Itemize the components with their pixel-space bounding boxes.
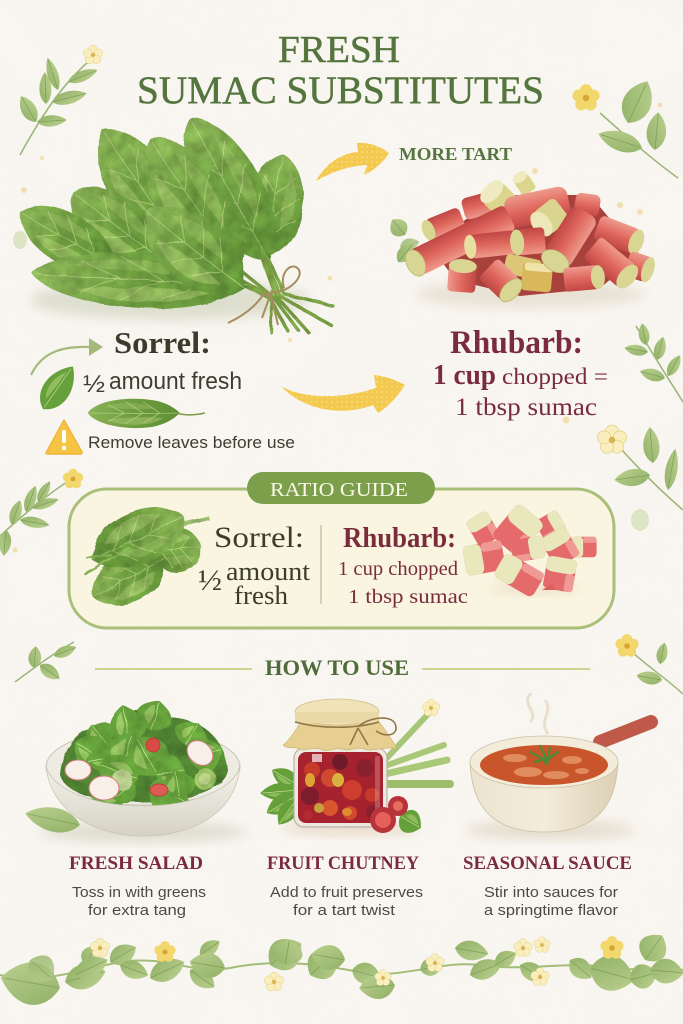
illustration: ratio sorrel: [81, 492, 209, 618]
illustration: sauce pot: [465, 693, 651, 839]
heading: sorrel: Sorrel:: [114, 325, 211, 360]
panel: ratio guide: [69, 472, 614, 628]
arrow: large yellow: [281, 375, 405, 413]
bowl interior: [46, 729, 240, 805]
garnish: [530, 746, 558, 764]
sprig: top right: [572, 75, 678, 178]
icon: warning: [46, 420, 82, 454]
radishes: [394, 806, 427, 838]
caption: seasonal sauce: Stir into sauces for: [484, 884, 618, 901]
jar cloth lid: [283, 718, 397, 750]
jar contents: [301, 754, 380, 820]
heading: rhubarb: Rhubarb:: [450, 325, 583, 361]
caption: seasonal sauce: a springtime flavor: [484, 902, 618, 919]
salad leaves: [60, 696, 228, 820]
illustration: ratio rhubarb: [462, 502, 597, 598]
sprig: right upper: [623, 322, 683, 402]
sauce: [480, 745, 608, 785]
sprig: top left: [14, 45, 103, 155]
caption: fruit chutney: [267, 853, 423, 919]
caption: fresh salad: FRESH SALAD: [69, 853, 203, 874]
caption: fresh salad: Toss in with greens: [72, 884, 206, 901]
caption: seasonal sauce: SEASONAL SAUCE: [463, 853, 632, 874]
label: more tart: MORE TART: [399, 144, 512, 164]
text: rhubarb ratio: 1 cup: [433, 359, 496, 391]
pot body: [470, 763, 618, 832]
radish slices: [65, 736, 218, 800]
splatter dots: [12, 102, 662, 552]
sprig: left lower: [15, 642, 78, 684]
icon: small sorrel leaf: [32, 359, 84, 417]
caption: fresh salad: [69, 853, 206, 919]
rhubarb stalks: [385, 712, 450, 784]
text: ratio sorrel: ½: [198, 564, 222, 597]
handle: [600, 722, 651, 742]
title: FRESH: [278, 29, 400, 71]
title: [137, 29, 544, 112]
text: ratio rhubarb: Rhubarb:: [343, 523, 456, 554]
garland: bottom border: [0, 927, 683, 1009]
text: half amount fresh: ½: [83, 371, 105, 398]
jar body: [294, 748, 387, 827]
caption: fresh salad: for extra tang: [88, 902, 186, 919]
caption: fruit chutney: Add to fruit preserves: [270, 884, 423, 901]
steam: [528, 693, 548, 734]
sprig: right lower: [615, 634, 683, 694]
badge: ratio guide: [247, 472, 435, 504]
sprig: right middle: [597, 425, 683, 510]
illustration: sorrel bunch: [8, 103, 333, 333]
text: ratio sorrel: amount: [226, 557, 311, 586]
illustration: chutney jar: [259, 699, 450, 838]
caption: fruit chutney: FRUIT CHUTNEY: [267, 853, 419, 874]
text: rhubarb ratio: 1 tbsp sumac: [455, 394, 597, 421]
text: half amount fresh: amount fresh: [109, 368, 242, 395]
arrow: small green curve: [31, 338, 103, 375]
icon: flat sorrel leaf: [88, 399, 205, 428]
section heading: how to use: HOW TO USE: [265, 655, 409, 680]
text: ratio rhubarb: 1 tbsp sumac: [348, 586, 468, 608]
illustration: salad bowl: [23, 696, 248, 842]
herb leaves: [259, 781, 299, 802]
caption: fruit chutney: for a tart twist: [293, 902, 396, 919]
side leaf: [23, 802, 82, 837]
text: remove leaves: Remove leaves before use: [88, 433, 295, 452]
text: ratio sorrel: fresh: [234, 581, 288, 610]
text: rhubarb ratio: [433, 359, 608, 421]
sprig: left middle: [0, 469, 83, 556]
bowl front: [46, 765, 240, 836]
divider: [320, 525, 322, 604]
text: rhubarb ratio: chopped =: [502, 364, 608, 389]
caption: seasonal sauce: [463, 853, 632, 919]
badge: ratio guide: RATIO GUIDE: [270, 479, 408, 501]
text: ratio sorrel: Sorrel:: [214, 521, 304, 554]
text: ratio sorrel: [198, 521, 311, 610]
text: ratio rhubarb: 1 cup chopped: [338, 558, 458, 580]
text: ratio rhubarb: [338, 523, 468, 608]
rhubarb pieces: [401, 168, 658, 306]
illustration: rhubarb pile: [385, 168, 658, 308]
arrow: more tart: [316, 143, 389, 181]
twine: [228, 267, 300, 325]
twine: [295, 718, 396, 745]
title: SUMAC SUBSTITUTES: [137, 69, 544, 112]
sorrel stems and leaves: [8, 103, 333, 333]
